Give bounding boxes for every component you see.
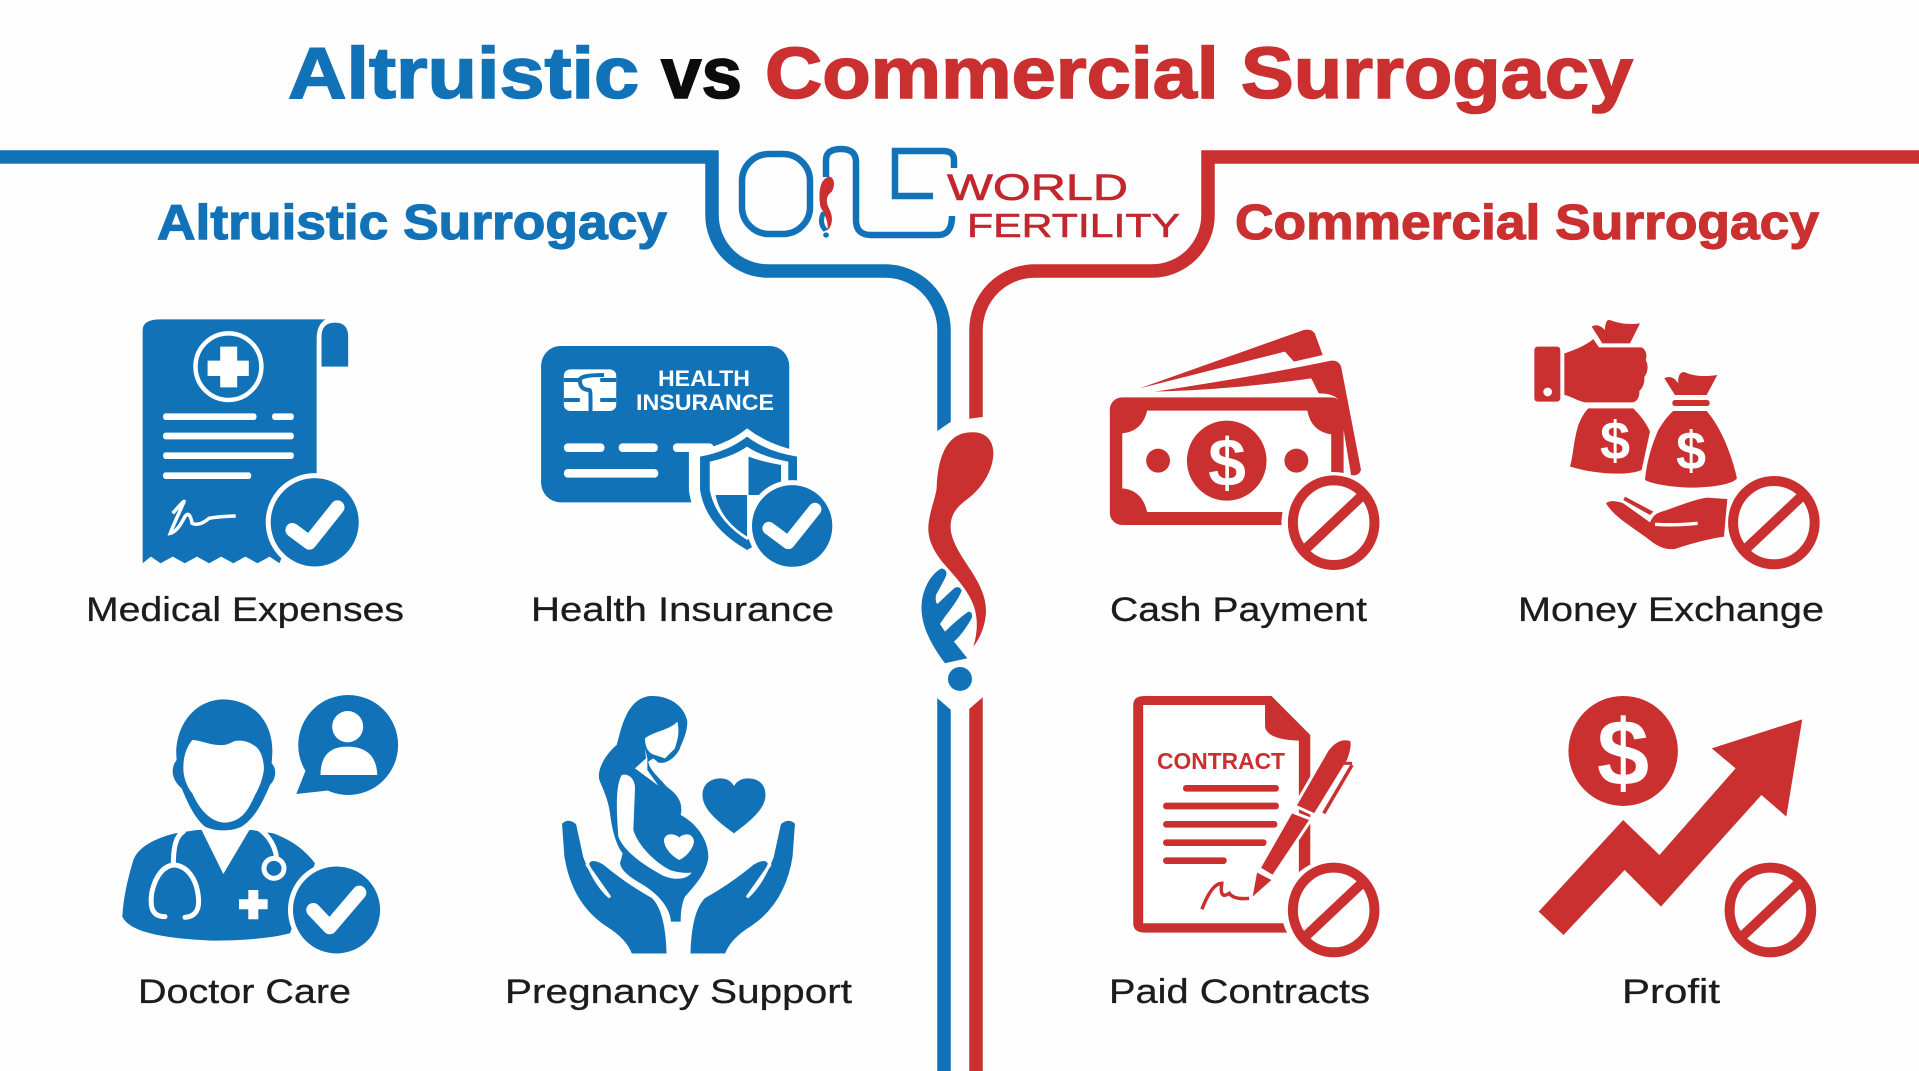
logo: One World Fertility: FERTILITY <box>967 207 1180 244</box>
blue divider line <box>0 157 944 1071</box>
icon: profit prohibited: $ <box>1597 700 1649 805</box>
icon: cash payment prohibited: $ <box>1208 425 1246 501</box>
icon: money exchange prohibited: $ <box>1600 411 1630 471</box>
icon: paid contract prohibited <box>1133 696 1386 961</box>
label: Cash Payment: Cash Payment <box>1110 591 1368 629</box>
panel: commercial items <box>1109 320 1824 1011</box>
icon: health insurance card: INSURANCE <box>636 390 774 415</box>
icon: pregnancy support <box>560 696 797 955</box>
logo: One World Fertility <box>742 149 1180 244</box>
title: Commercial Surrogacy <box>765 34 1633 114</box>
icon: profit prohibited <box>1539 696 1811 952</box>
label: Money Exchange: Money Exchange <box>1518 591 1824 629</box>
icon: health insurance card <box>541 346 835 569</box>
icon: cash payment prohibited <box>1110 330 1386 573</box>
icon: paid contract prohibited: CONTRACT <box>1157 748 1285 774</box>
label: Paid Contracts: Paid Contracts <box>1109 973 1370 1011</box>
title: vs <box>661 34 742 114</box>
icon: doctor care <box>122 695 398 956</box>
label: Profit: Profit <box>1622 973 1721 1011</box>
icon: money exchange prohibited: $ <box>1676 421 1706 481</box>
heading: Commercial Surrogacy: Commercial Surrogacy <box>1235 196 1819 250</box>
panel: altruistic items <box>86 319 853 1011</box>
icon: medical expenses bill <box>143 319 361 569</box>
label: Doctor Care: Doctor Care <box>138 973 351 1011</box>
label: Pregnancy Support: Pregnancy Support <box>505 973 853 1011</box>
title <box>288 34 1633 114</box>
icon: money exchange prohibited <box>1534 320 1815 564</box>
icon: health insurance card: HEALTH <box>658 366 750 391</box>
icon: central sperm and DNA <box>921 432 993 691</box>
label: Health Insurance: Health Insurance <box>531 591 834 629</box>
logo: One World Fertility: WORLD <box>947 167 1128 208</box>
red divider line <box>976 157 1919 1071</box>
title: Altruistic <box>288 34 639 114</box>
label: Medical Expenses: Medical Expenses <box>86 591 404 629</box>
heading: Altruistic Surrogacy: Altruistic Surrogacy <box>157 196 667 250</box>
